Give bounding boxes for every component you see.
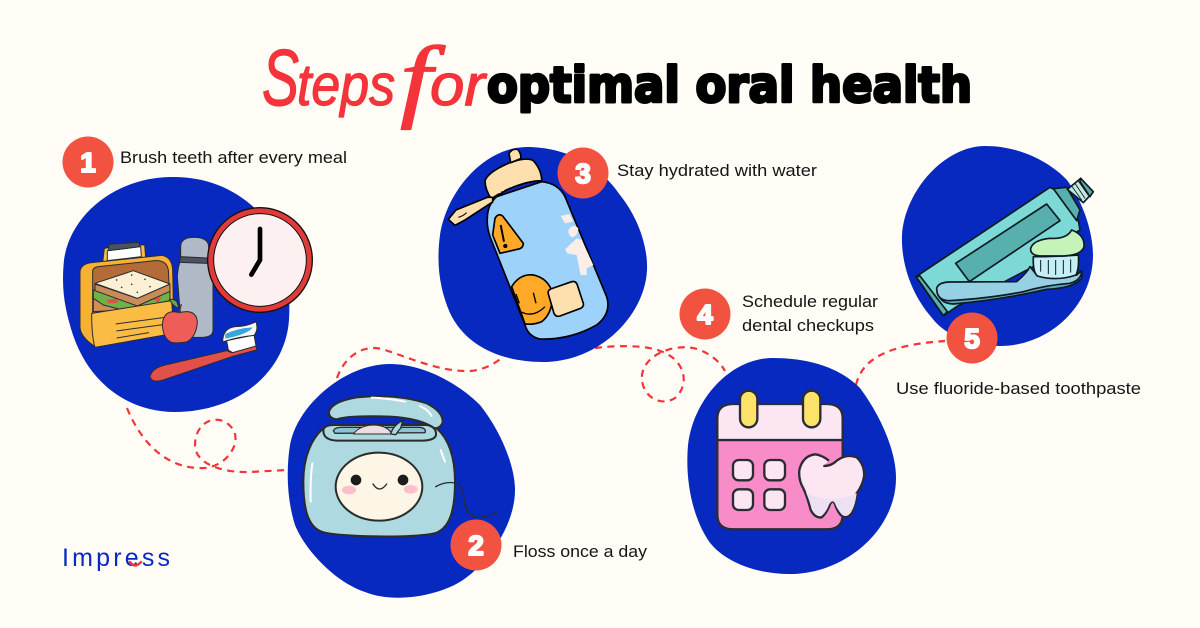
- logo: Impress: [62, 544, 170, 572]
- step 4 panel: [680, 288, 896, 574]
- icon: lunchbox, flask, apple, clock and toothbrush: [80, 208, 312, 381]
- label 3: Stay hydrated with water: [617, 162, 818, 180]
- label 4: dental checkups: [742, 317, 874, 335]
- badge 1: 1: [80, 147, 96, 178]
- label 4: Schedule regular: [742, 293, 879, 311]
- badge 4: 4: [697, 299, 713, 330]
- label 1: Brush teeth after every meal: [120, 149, 347, 167]
- badge 3: 3: [575, 158, 591, 189]
- blob 3: [438, 147, 647, 362]
- badge 2: [450, 520, 502, 570]
- label 4: [742, 293, 879, 335]
- dashed connector 3 to 4: [595, 346, 725, 401]
- step 3 panel: [438, 147, 818, 362]
- label 5: Use fluoride-based toothpaste: [896, 380, 1141, 398]
- badge 5: [946, 312, 998, 364]
- title script part: teps: [297, 53, 395, 118]
- badge 5: 5: [964, 323, 980, 354]
- title bold part: optimal oral health: [487, 57, 972, 114]
- step 5 panel: [896, 146, 1141, 398]
- blob 2: [288, 364, 515, 598]
- label 2: Floss once a day: [513, 543, 648, 561]
- badge 4: [680, 288, 730, 340]
- badge 1: [62, 136, 114, 188]
- title script part: f: [400, 28, 446, 130]
- dashed connector 4 to 5: [856, 341, 945, 385]
- blob 4: [687, 358, 896, 574]
- icon: water bottle with stickers: [448, 149, 608, 339]
- blob 1: [63, 177, 289, 412]
- badge 2: 2: [468, 530, 484, 561]
- step 2 panel: [288, 364, 648, 598]
- dashed connector 1 to 2: [127, 408, 287, 472]
- icon: toothpaste tube and brush: [916, 178, 1093, 316]
- title script part: or: [430, 53, 488, 118]
- icon: calendar with tooth: [717, 391, 864, 529]
- step 1 panel: [62, 136, 347, 412]
- dashed connector 2 to 3: [337, 348, 503, 378]
- blob 5: [902, 146, 1093, 346]
- title script part: S: [262, 33, 299, 122]
- title: [262, 28, 972, 130]
- badge 3: [558, 148, 608, 198]
- title script part: [262, 28, 488, 130]
- icon: floss box with face: [303, 396, 497, 536]
